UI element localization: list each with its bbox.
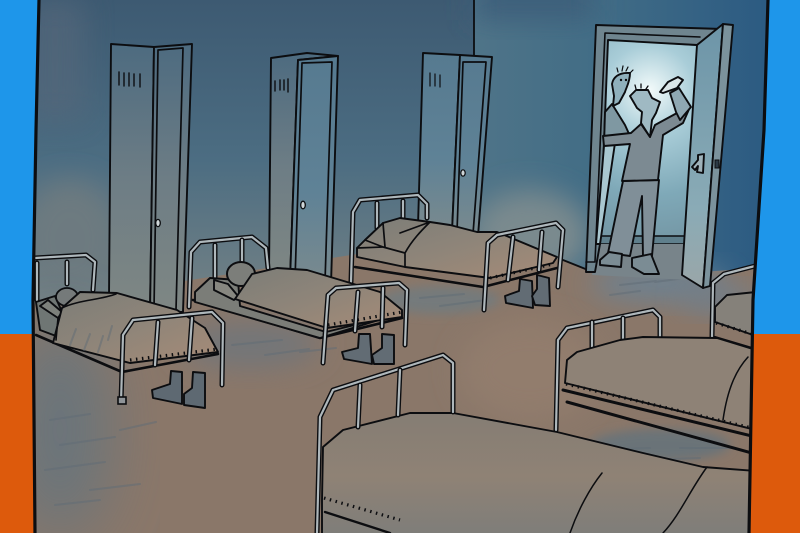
- bed frame: [355, 267, 557, 287]
- fringe: [324, 498, 400, 520]
- locker handle: [461, 170, 465, 176]
- floor threshold: [592, 244, 690, 280]
- door opening with light: [598, 40, 697, 244]
- bed frame: [193, 300, 402, 338]
- fringe: [328, 312, 402, 325]
- mattress base: [195, 278, 395, 338]
- blanket fold: [56, 294, 116, 340]
- foot rail: [121, 312, 223, 402]
- floor: [10, 236, 760, 533]
- mattress base: [36, 296, 115, 358]
- head rail: [556, 310, 660, 430]
- mattress fold: [723, 357, 748, 420]
- open door leaf: [682, 24, 723, 288]
- boots: middle bed: [342, 334, 394, 364]
- scene border: right: [749, 0, 768, 533]
- bed: far right edge: [712, 266, 756, 348]
- head and neck: [630, 90, 660, 137]
- locker vents: [119, 72, 140, 87]
- man behind: [596, 66, 633, 244]
- raised forearm: [670, 88, 691, 120]
- back wall: [20, 0, 475, 320]
- blanket hatching: [70, 326, 112, 352]
- head rail: [189, 237, 268, 307]
- bed: lower right: [556, 310, 756, 453]
- blanket folds: [357, 222, 430, 267]
- fringe: [130, 349, 218, 360]
- bed frame: [563, 390, 752, 453]
- doorway: [586, 24, 733, 288]
- door latch: [715, 160, 719, 168]
- bed frame: [36, 335, 218, 372]
- head rail: [317, 355, 453, 533]
- blanket: [53, 292, 218, 363]
- background: orange lower band: [0, 334, 800, 533]
- door handle: [692, 154, 704, 173]
- locker: right: [418, 53, 492, 236]
- locker handle: [156, 219, 160, 227]
- sleeper head: [56, 288, 78, 306]
- locker: middle: [269, 53, 338, 284]
- pillow: [40, 300, 62, 318]
- bed: back right: [351, 195, 563, 310]
- door frame: [586, 25, 722, 272]
- head rail: [712, 266, 755, 337]
- foot rail: [323, 283, 407, 363]
- head rail: [35, 255, 95, 290]
- bed frame: [715, 337, 752, 348]
- floor hatching: [45, 270, 730, 505]
- boots: back bed: [505, 275, 550, 308]
- baseboard in opening: [600, 236, 686, 244]
- background: blue upper band: [0, 0, 800, 334]
- bottle: [660, 77, 683, 93]
- scene border: left: [33, 0, 39, 533]
- bed: foreground: [317, 355, 756, 533]
- torso and arms: [602, 110, 690, 182]
- fringe: [490, 264, 553, 278]
- pillow: [214, 280, 238, 300]
- shoes: [600, 252, 622, 267]
- fringe: [716, 323, 752, 334]
- mattress folds: [570, 467, 707, 533]
- locker handle: [301, 201, 305, 209]
- legs: [608, 180, 659, 258]
- boots: front left bed: [152, 371, 205, 408]
- mattress: [565, 337, 756, 430]
- bed frame: [325, 512, 390, 533]
- locker: left: [109, 44, 192, 312]
- bed: middle: [189, 237, 407, 363]
- sleeper head: [227, 262, 255, 286]
- right wall: [473, 0, 766, 272]
- locker vents: [430, 73, 440, 87]
- head rail: [351, 195, 427, 282]
- door leaf edge: [703, 24, 733, 288]
- fringe: [566, 384, 752, 428]
- mattress: [322, 413, 756, 533]
- foot rail: [484, 223, 563, 310]
- blanket: [235, 268, 402, 328]
- mattress: [357, 218, 557, 278]
- rail feet: [118, 397, 126, 404]
- bed: front left: [35, 255, 223, 404]
- locker vents: [275, 79, 288, 92]
- man drinking from bottle: [600, 77, 691, 274]
- mattress: [715, 292, 756, 336]
